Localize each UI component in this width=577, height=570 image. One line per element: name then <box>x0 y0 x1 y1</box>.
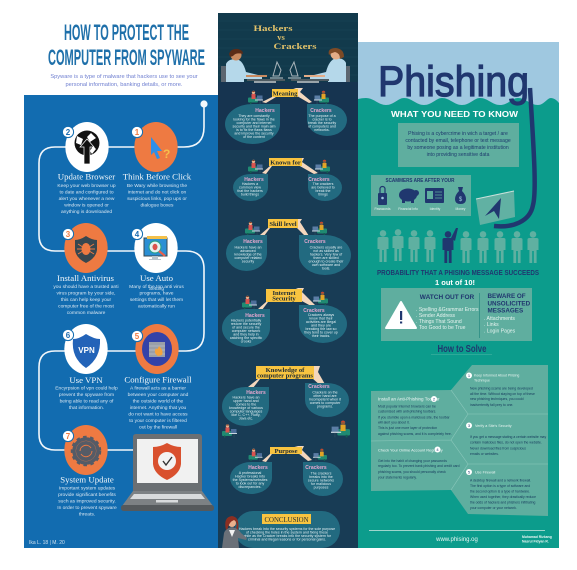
section: skill level: knowledge of the <box>234 252 262 256</box>
step 3: install antivirus: common malware <box>67 310 106 316</box>
sky background <box>358 42 559 548</box>
watch out box: . Things That Sound <box>416 319 462 325</box>
section: purpose: Hacker breaks into <box>235 474 265 478</box>
header band <box>218 13 358 82</box>
section: purpose: to look out for any <box>236 482 264 486</box>
step 2: update browser: anything is downloaded <box>61 209 112 215</box>
section: internet security: crooks <box>241 340 251 344</box>
solution 5: the odds of hackers and phishers infiltrating <box>470 500 536 504</box>
step 7: system update: threats. <box>79 512 95 518</box>
section: skill level: computer related <box>235 256 261 260</box>
title: how to protect: HOW TO PROTECT THE <box>64 20 189 45</box>
section: knowledge of computer programs: knowledge of various <box>229 406 263 410</box>
watch out box: BEWARE OF <box>488 293 526 300</box>
section: internet security: activities are illegal <box>306 320 336 324</box>
section: internet security: restore the security <box>231 322 261 326</box>
solution 4 <box>378 446 460 480</box>
step 2: update browser: Update Browser <box>58 172 115 182</box>
section: internet security: and they help in <box>233 332 259 336</box>
section: skill level: Skill level <box>269 221 297 228</box>
footer <box>369 530 552 544</box>
section: internet security: catching the specific <box>230 336 262 340</box>
step 7: system update: provide significant benefits <box>58 492 116 498</box>
conclusion <box>235 511 340 548</box>
section: purpose <box>230 446 343 496</box>
step 3: install antivirus: 3 <box>66 230 71 239</box>
solution 3: contain malicious files, do not open the website. <box>470 440 542 444</box>
step 5: configure firewall: out by the firewall <box>139 424 177 430</box>
step 4: use auto: Many of the top anti virus <box>129 284 184 290</box>
section: purpose: The crackers <box>311 472 332 476</box>
section: skill level: Hackers have an <box>235 246 261 250</box>
connector path <box>39 100 208 450</box>
section: known for <box>233 158 342 201</box>
section: knowledge of computer programs: other hand are <box>313 394 337 398</box>
solution 1: Technique <box>474 378 490 382</box>
section: meaning: Meaning <box>273 90 298 98</box>
section: knowledge of computer programs <box>222 366 350 438</box>
step 5: configure firewall: between your computer and <box>128 392 189 398</box>
section: purpose: Purpose <box>274 448 298 455</box>
definition box: into providing sensitive data <box>427 152 490 158</box>
icon: piggy bank <box>399 188 419 203</box>
hook and line <box>494 88 535 226</box>
watch out box: Too Good to be True <box>419 325 466 331</box>
section: purpose: Hackers <box>248 465 268 471</box>
watch out box: MESSAGES <box>488 308 523 314</box>
section: meaning: Hackers <box>255 108 275 114</box>
conclusion: CONCLUSION <box>264 515 309 524</box>
section: meaning: networks. <box>314 128 330 132</box>
scammers box: Money <box>456 207 466 211</box>
section: known for: are believed to <box>311 186 335 190</box>
solution 2: customized with anti-phishing toolbars. <box>378 410 436 414</box>
section: known for: break the <box>316 189 330 193</box>
section: meaning: Crackers <box>310 108 332 114</box>
section: purpose: discrepancies. <box>239 485 261 489</box>
solution 3 <box>466 422 546 456</box>
solution 1 <box>466 372 535 407</box>
solution 5: The first option is a type of software and <box>470 484 530 488</box>
title: hackers vs crackers: Crackers <box>274 41 317 51</box>
step 1: think before click: ? <box>163 147 170 161</box>
step 3: install antivirus: Install Antivirus <box>57 273 115 283</box>
illustration: woman presenter <box>222 516 247 548</box>
section: knowledge of computer programs: computer programs <box>257 372 313 380</box>
step 2: update browser: alert you whenever a new <box>59 196 115 202</box>
solution 5: When used together, they drastically reduce <box>470 495 536 499</box>
intro text: personal information, banking details, or more. <box>66 82 183 88</box>
step 4: use auto: automatically run <box>138 304 175 310</box>
step 5: configure firewall: do not want to have access <box>128 412 188 418</box>
pictogram: one in ten people <box>378 228 538 263</box>
section: known for: Known for <box>270 160 301 166</box>
watch out box: . Attachments <box>484 316 515 322</box>
section: known for: Hackers <box>244 177 264 183</box>
step 5: configure firewall <box>124 324 192 430</box>
section: known for: that the hackers <box>237 189 263 193</box>
solution 2: will alert you about it. <box>378 420 410 424</box>
probability statement <box>377 270 539 287</box>
solution 2: Most popular Internet browsers can be <box>378 404 436 408</box>
solution 3: If you get a message stating a certain website may <box>470 435 546 439</box>
section: skill level: own software and <box>312 263 340 267</box>
step 5: configure firewall: internet. Anything that you <box>130 405 187 411</box>
section: meaning: computer and internet <box>237 121 271 125</box>
footer: Muhamad Rizkang <box>522 535 552 539</box>
step 4: use auto: Setting <box>149 286 164 292</box>
watch out box: . Sender Address <box>416 313 456 319</box>
section: internet security: Crackers <box>303 308 325 314</box>
section: internet security: their tracks. <box>312 334 330 338</box>
credit: Ika L. 18 | M. 20 <box>29 540 65 546</box>
section: meaning: break the security <box>308 121 336 125</box>
section: purpose: secure networks <box>308 478 334 482</box>
footer: www.phising.og <box>435 537 478 543</box>
step 6: use vpn: Use VPN <box>69 375 103 385</box>
step 6: use vpn: 6 <box>66 331 71 340</box>
step 2: update browser: 2 <box>66 128 71 137</box>
section: knowledge of computer programs: Crackers <box>308 384 330 390</box>
solution 4: phishing scams, you should personally check <box>378 470 446 474</box>
probability statement: PROBABILITY THAT A PHISING MESSAGE SUCCEEDS <box>377 270 539 277</box>
section: skill level: security <box>242 260 254 264</box>
probability statement: 1 out of 10! <box>435 278 475 287</box>
solution 1: 1 <box>468 373 471 378</box>
step 6: use vpn: being able to read any of <box>60 398 114 404</box>
solution 5: A desktop firewall and a network firewall. <box>470 478 531 482</box>
step 1: think before click: 1 <box>135 128 140 137</box>
step 6: use vpn: VPN <box>78 346 95 355</box>
section: skill level: advanced <box>240 249 256 253</box>
section: skill level: enough to create their <box>309 260 344 264</box>
title: phishing: Phishing <box>378 58 529 106</box>
section: internet security: Hackers potentially <box>231 318 261 322</box>
step 4: use auto: Use Auto <box>140 273 174 283</box>
section: knowledge of computer programs: computer languages <box>230 410 262 414</box>
section: purpose: breaks into the <box>309 475 333 479</box>
section: internet security: Security <box>272 296 296 302</box>
section: meaning: looking for the flaws in the <box>233 118 275 122</box>
step 6: use vpn: Encyrpsion of vpn could help <box>55 386 118 392</box>
solution 4: 4 <box>436 447 439 452</box>
icon: id card <box>425 188 444 203</box>
section: meaning <box>225 88 347 144</box>
solution 2: 2 <box>433 396 436 402</box>
solution 4: Get into the habit of changing your passwords <box>378 459 447 463</box>
scammers box: Financial Info <box>398 207 418 211</box>
watch out box: . Links <box>484 322 499 328</box>
icon: email on hook <box>476 191 515 225</box>
step 2: update browser: window is opened or <box>64 202 109 208</box>
intro text: Spyware is a type of malware that hackers use to see your <box>50 74 198 80</box>
solution 1: inadvertently fall prey to one. <box>470 403 513 407</box>
definition box: contacted by email, telephone or text message <box>405 138 511 144</box>
section: internet security: breaking the law so <box>306 327 336 331</box>
step 4: use auto: programs, have <box>140 290 174 296</box>
step 6: use vpn: prevent the spyware from <box>59 392 114 398</box>
definition box: Phising is a cybercrime in wich a target / are <box>408 131 508 137</box>
step 6: use vpn <box>55 324 118 411</box>
section: internet security: Internet <box>272 290 296 297</box>
solution 2: Install an Anti-Phishing Toolbar <box>378 396 440 402</box>
solution 1: new phishing techniques, you could <box>470 397 524 401</box>
section: internet security: Crackers always <box>308 313 334 317</box>
scammers box: SCAMMERS ARE AFTER YOUR <box>386 178 455 184</box>
step 5: configure firewall: Configure Firewall <box>124 374 192 384</box>
watch out box: UNSOLICITED <box>488 300 531 308</box>
section: internet security: and they are <box>311 324 331 328</box>
section: knowledge of computer programs: Knowledge of <box>266 367 305 374</box>
section: known for: Hackers a <box>242 182 258 186</box>
step 3: install antivirus: this can help keep your <box>61 297 112 303</box>
title: hackers vs crackers: vs <box>277 32 285 42</box>
section: knowledge of computer programs: Hackers have an <box>233 396 259 400</box>
sea background with waves <box>358 98 559 548</box>
section: purpose: Crackers <box>305 465 327 471</box>
section: meaning: of the content <box>243 135 265 139</box>
step 5: configure firewall: to your computer is filtered <box>129 418 187 424</box>
step 1: think before click: dialogue boxes <box>141 202 174 208</box>
section: skill level: Hackers <box>243 239 263 245</box>
illustration: two people at computers <box>221 48 350 83</box>
step 7: system update: Important system updates <box>59 486 116 492</box>
section: knowledge of computer programs: like C, C++, Ruby, <box>232 413 260 417</box>
step 2: update browser: Keep your web browser up <box>57 183 116 189</box>
meaning band <box>218 82 358 150</box>
section: purpose: A professional <box>239 471 261 475</box>
solution 5 <box>466 469 536 510</box>
step 1: think before click: Be Wary while browsing the <box>127 183 187 189</box>
section: known for: Crackers <box>308 177 330 183</box>
title: how to protect: COMPUTER FROM SPYWARE <box>48 45 205 70</box>
section: purpose: purposes <box>314 486 329 490</box>
solutions panel <box>371 365 548 516</box>
conclusion: criminal and illegal reasons or for personal gains. <box>248 538 326 542</box>
heading: how to solve: How to Solve <box>438 344 487 355</box>
step 2: update browser: to date and configured to <box>59 190 114 196</box>
section: skill level <box>226 219 351 275</box>
watch out box: . Login Pages <box>484 328 516 334</box>
footer: Nasrul Fidyan R. <box>522 540 549 544</box>
step 1: think before click <box>123 122 192 208</box>
section: internet security <box>222 288 347 347</box>
solution 4: regularly too. To prevent bank phishing and credit card <box>378 464 460 468</box>
subtitle: WHAT YOU NEED TO KNOW <box>391 109 518 119</box>
title: hackers vs crackers: Hackers <box>254 23 293 33</box>
section: knowledge of computer programs: programs. <box>317 404 333 408</box>
section: meaning: security and their main aim <box>233 124 275 128</box>
conclusion: of checking the holes in the system and fixing these <box>246 530 328 534</box>
section: meaning: and improve the security <box>234 132 274 136</box>
scammers box <box>371 175 471 216</box>
solution 2: If you stumble upon a malicious site, the toolbar <box>378 416 450 420</box>
section: skill level: not as skilled as <box>313 249 339 253</box>
step 1: think before click: Think Before Click <box>123 172 192 182</box>
solution 5: 5 <box>468 470 471 474</box>
step 1: think before click: suspicious links, pop ups or <box>127 196 187 202</box>
watch out box: . Spelling &Grammar Errors <box>416 307 479 313</box>
section: knowledge of computer programs: Hackers <box>246 390 266 396</box>
icon: money bag: $ <box>459 197 463 203</box>
section: meaning: The purpose of a <box>308 114 336 118</box>
laptop with shield <box>121 434 214 511</box>
section: internet security: computer network <box>232 329 260 333</box>
section: knowledge of computer programs: upper hand and <box>233 399 259 403</box>
step 4: use auto <box>129 223 184 310</box>
section: known for: build things <box>241 192 259 196</box>
section: knowledge of computer programs: Crackers on the <box>312 390 338 394</box>
title: hackers vs crackers <box>254 23 317 51</box>
solution 5: your computer or your network. <box>470 506 517 510</box>
solution 4: Check Your Online Account Regularly <box>378 448 443 452</box>
solution 3: Never download files from suspicious <box>470 446 526 450</box>
step 6: use vpn: that information. <box>69 405 104 411</box>
step 5: configure firewall: A firewall acts as a barrier <box>130 386 186 392</box>
conclusion: Hackers break into the security systems for the sole purpose <box>239 527 335 531</box>
step 7: system update: 7 <box>66 432 71 441</box>
step 7: system update: System Update <box>60 474 114 484</box>
section: meaning: They are constantly <box>238 114 270 118</box>
section: known for: things <box>318 192 328 196</box>
section: skill level: hackers. Very few of <box>310 252 342 256</box>
solution 1: Keep Informed About Phising <box>474 374 519 378</box>
watch out box <box>381 288 532 341</box>
section: meaning: of computers and <box>308 124 336 128</box>
solution 3: Verify a Site's Security <box>475 424 512 428</box>
definition box: by someone posing as a legitimate institution <box>407 145 509 151</box>
section: internet security: of and secure the <box>232 326 260 330</box>
section: meaning: cracker is to <box>312 118 332 122</box>
section: purpose: the Systems/websites <box>233 478 268 482</box>
solution 5: Use Firewall <box>475 470 495 474</box>
section: skill level: Crackers usually are <box>310 246 342 250</box>
definition box <box>398 123 519 167</box>
conclusion: while as the Cracker breaks into the security system for <box>243 534 332 538</box>
solution 2: against phishing scams, and it is completely free. <box>378 432 452 436</box>
panel: phishing <box>358 42 559 548</box>
step 3: install antivirus <box>53 223 119 316</box>
step 7: system update: In order to prevent spyware <box>57 505 117 511</box>
section: internet security: Hackers <box>245 313 265 319</box>
step 7: system update: such as improved security. <box>58 498 116 504</box>
step 3: install antivirus: computer free of the most <box>58 304 114 310</box>
section: known for: The crackers <box>313 182 334 186</box>
step 3: install antivirus: you should have a trusted anti <box>53 284 119 290</box>
watch out box: WATCH OUT FOR <box>420 294 475 301</box>
section: skill level: them are skilled <box>313 256 339 260</box>
step 7: system update <box>57 425 117 518</box>
step 5: configure firewall: 5 <box>135 332 140 341</box>
solution 4: your statements regularly. <box>378 476 417 480</box>
section: internet security: know that their <box>309 316 333 320</box>
solution 2 <box>378 396 452 436</box>
section: knowledge of computer programs: comes to computer <box>310 401 341 405</box>
solution 3: 3 <box>468 423 471 428</box>
step 1: think before click: internet and do not click on <box>128 190 186 196</box>
section: internet security: they tend to cover up <box>304 330 338 334</box>
panel: spyware infographic <box>24 20 218 548</box>
step 2: update browser <box>57 122 116 215</box>
solution 1: all the time. Without staying on top of these <box>470 392 535 396</box>
solution 5: the second option is a type of hardware. <box>470 490 530 494</box>
section: meaning: is to fix the flaws flaws <box>236 128 272 132</box>
section: skill level: Crackers <box>304 239 326 245</box>
step 4: use auto: settings that will let them <box>130 297 183 303</box>
scammers box: Passwords <box>374 207 391 211</box>
icon: padlock <box>378 186 387 205</box>
section: skill level: tools. <box>322 266 330 270</box>
section: purpose: for malicious <box>311 482 331 486</box>
title: how to protect <box>48 20 205 70</box>
intro text <box>50 74 198 88</box>
section: knowledge of computer programs: comes to the <box>236 402 256 406</box>
section: knowledge of computer programs: Java etc. <box>239 416 253 420</box>
blue background <box>24 95 218 548</box>
section: known for: common view <box>239 186 261 190</box>
solution 3: emails or websites. <box>470 452 499 456</box>
step 3: install antivirus: virus program by your side, <box>57 290 115 296</box>
solution 2: This is just one more layer of protection <box>378 426 437 430</box>
dark background <box>218 13 358 548</box>
section: knowledge of computer programs: incompetent when it <box>309 398 341 402</box>
step 5: configure firewall: the outside world of the <box>133 398 184 404</box>
panel: hackers vs crackers <box>218 13 358 548</box>
step 4: use auto: 4 <box>135 230 140 239</box>
scammers box: Identity <box>430 207 441 211</box>
solution 1: New phishing scams are being developed <box>470 386 533 390</box>
